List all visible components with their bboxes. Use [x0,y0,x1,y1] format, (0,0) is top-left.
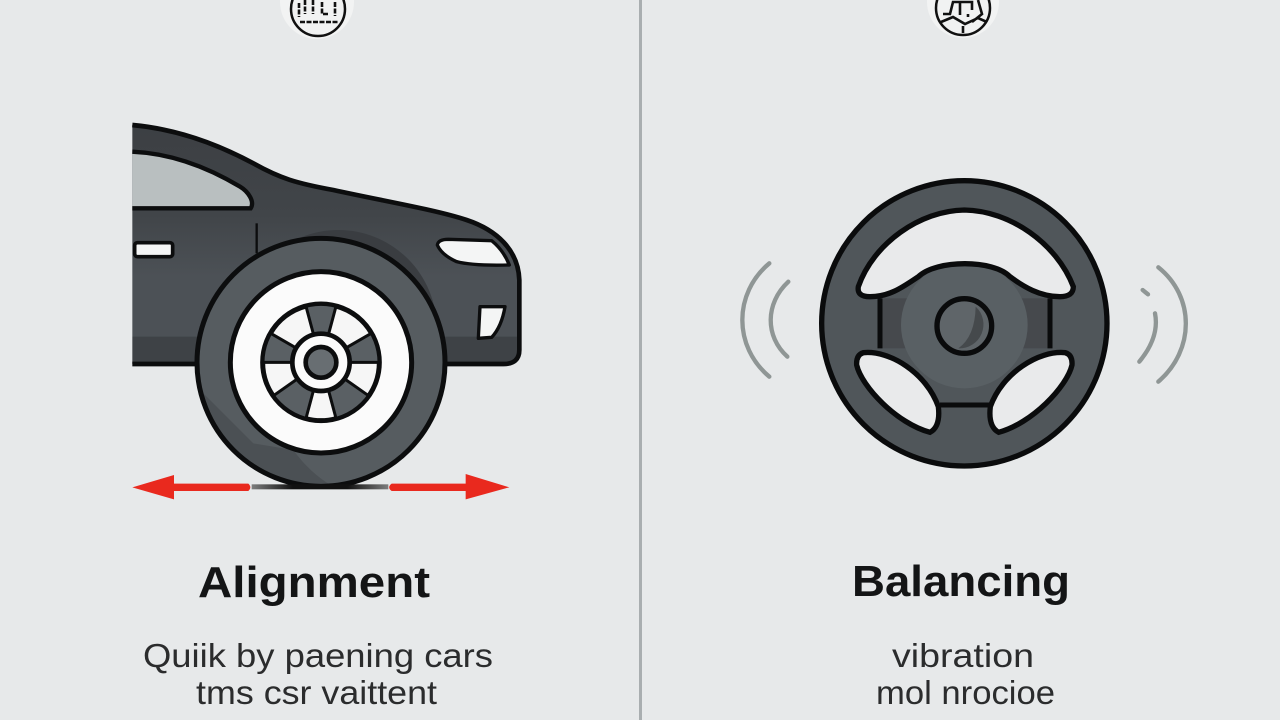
hub [937,299,992,353]
icon: balancing badge [927,0,999,38]
car body [132,122,522,366]
heading: Balancing: Balancing [852,557,1070,606]
vibration marks: left [742,263,788,377]
panel: balancing [742,0,1186,711]
text block: balancing description: vibration [892,637,1034,674]
text block: balancing description: mol nrocioe [876,674,1055,711]
heading: Alignment: Alignment [198,558,430,607]
text block: alignment description [143,637,493,711]
vibration marks: right [1139,267,1186,382]
fog light [478,307,505,338]
illustration: steering wheel with vibration marks [742,181,1186,466]
ground line [252,484,388,489]
illustration: car front with wheel and alignment arrows [132,125,522,499]
arrow: right [389,474,509,499]
lower left opening [857,352,939,432]
steering wheel [822,181,1107,466]
lower right opening [990,352,1072,432]
panel: alignment [132,0,522,711]
arrow: left [132,475,250,499]
text block: alignment description: Quiik by paening cars [143,637,493,674]
top opening [858,210,1073,297]
icon: alignment badge [280,0,354,39]
car window [132,152,252,208]
wheel [187,238,445,490]
door handle [135,243,173,257]
text block: balancing description [876,637,1055,711]
text block: alignment description: tms csr vaittent [196,674,437,711]
headlight [437,239,509,265]
